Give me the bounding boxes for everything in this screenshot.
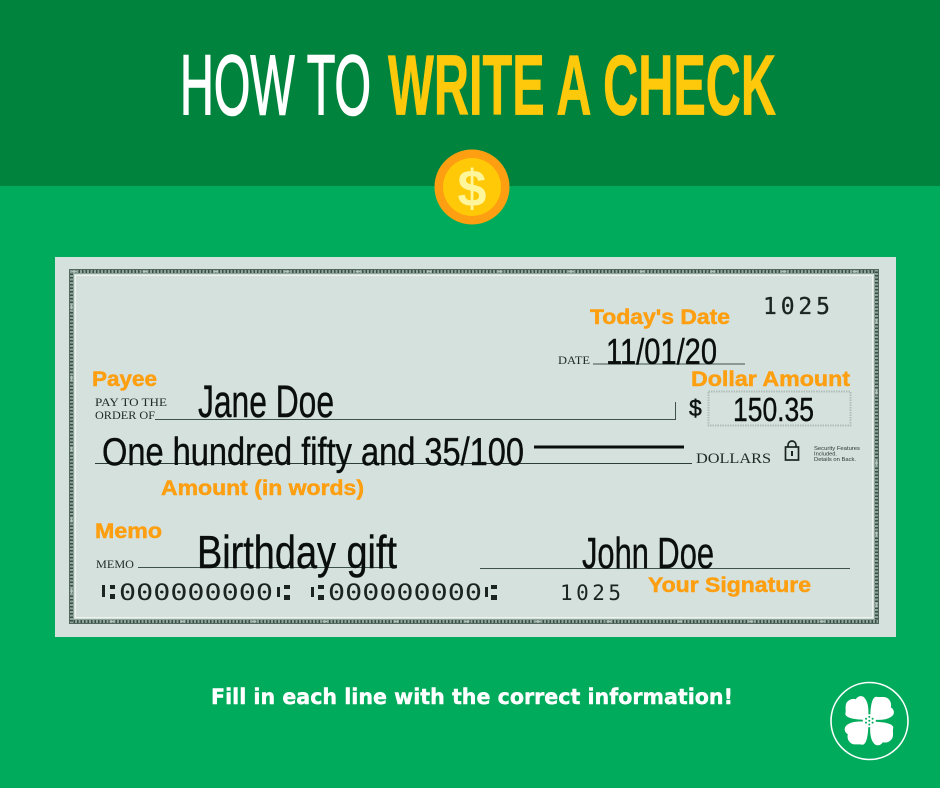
security features note: Details on Back.	[814, 457, 856, 463]
payee field	[95, 376, 676, 427]
date field: 11/01/20	[606, 331, 717, 372]
icon: gold dollar coin: $	[458, 160, 487, 218]
amount in words field: One hundred fifty and 35/100	[102, 431, 524, 474]
date field: DATE	[558, 355, 590, 367]
memo field	[96, 526, 397, 578]
MICR routing and account numbers	[102, 581, 621, 606]
dollar amount box	[689, 391, 850, 428]
icon: gold dollar coin	[434, 150, 510, 224]
memo field: Birthday gift	[197, 526, 397, 578]
security features note	[814, 446, 860, 463]
amount in words field: DOLLARS	[696, 451, 771, 467]
MICR routing and account numbers: 000000000	[119, 581, 273, 606]
header band: dark green	[0, 0, 940, 186]
panel: check image	[55, 257, 896, 637]
check number: 1025	[763, 294, 830, 320]
title: HOW TO	[180, 38, 371, 134]
payee field: ORDER OF	[95, 410, 155, 422]
caption: Fill in each line with the correct information!	[211, 685, 733, 709]
MICR routing and account numbers: 000000000	[328, 581, 482, 606]
dollar amount box: 150.35	[733, 391, 814, 428]
logo: white flower in circle	[831, 682, 908, 760]
label: today's date: Today's Date	[590, 306, 730, 329]
MICR routing and account numbers: 1025	[560, 581, 621, 605]
label: your signature: Your Signature	[648, 574, 811, 597]
payee field: PAY TO THE	[95, 397, 167, 409]
label: dollar amount: Dollar Amount	[691, 368, 850, 391]
label: payee: Payee	[92, 368, 157, 391]
label: amount in words: Amount (in words)	[161, 477, 364, 500]
check ornamental border	[70, 270, 878, 624]
security features note: Security Features	[814, 446, 860, 452]
title	[180, 38, 776, 134]
signature field: John Doe	[582, 529, 714, 578]
icon: padlock	[786, 441, 798, 460]
payee field: Jane Doe	[198, 376, 334, 427]
check paper	[55, 257, 896, 637]
label: memo: Memo	[95, 520, 162, 543]
memo field: MEMO	[96, 559, 134, 571]
dollar amount box: $	[689, 395, 702, 421]
security features note: Included.	[814, 452, 837, 458]
